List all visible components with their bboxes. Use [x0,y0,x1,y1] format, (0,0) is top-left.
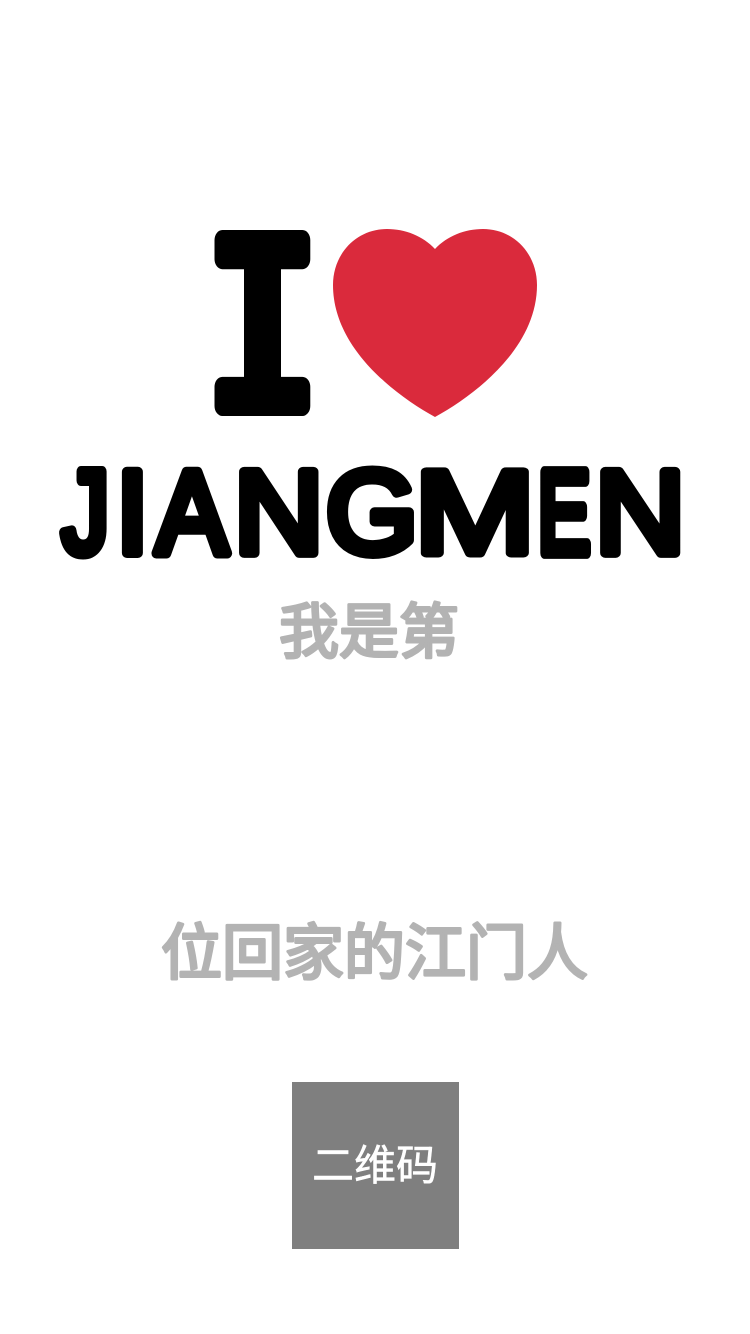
wordmark JIANGMEN: A [156,446,228,578]
wordmark JIANGMEN [62,446,685,579]
text: 位回家的江门人: 位回家的江门人 [161,919,588,987]
logo: I love Jiangmen [59,197,685,987]
wordmark JIANGMEN: E [538,447,590,579]
letter I: I [203,197,322,483]
QR code placeholder [292,1082,459,1249]
wordmark JIANGMEN: J [62,446,109,578]
wordmark JIANGMEN: N [595,446,685,578]
wordmark JIANGMEN: N [234,446,323,578]
placeholder label: 二维码 [312,1142,438,1189]
wordmark JIANGMEN: M [414,447,535,579]
icon: red heart [333,229,537,417]
wordmark JIANGMEN: G [326,447,418,579]
wordmark JIANGMEN: I [116,447,149,579]
text: 我是第: 我是第 [279,599,459,666]
